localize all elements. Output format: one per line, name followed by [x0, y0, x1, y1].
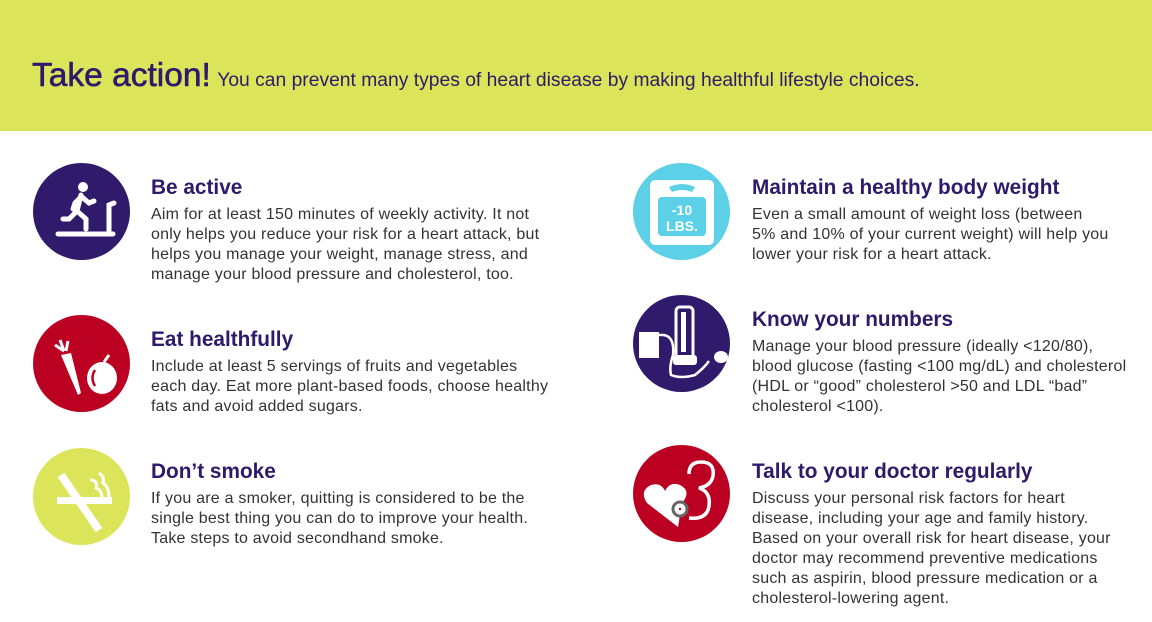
item: be active — [151, 176, 539, 283]
item: talk to doctor: Talk to your doctor regularly — [752, 460, 1032, 483]
title: Take action! You can prevent many types of heart disease by making healthful lifestyle choices. — [32, 57, 920, 94]
item: don't smoke: Take steps to avoid secondhand smoke. — [151, 530, 444, 547]
item: be active: helps you manage your weight, manage stress, and — [151, 246, 528, 263]
header banner — [0, 0, 1152, 131]
item: don't smoke: If you are a smoker, quitting is considered to be the — [151, 490, 525, 507]
item: know your numbers — [752, 308, 1126, 415]
item: be active: only helps you reduce your risk for a heart attack, but — [151, 226, 539, 243]
item: don't smoke — [151, 460, 528, 547]
item: talk to doctor: doctor may recommend preventive medications — [752, 550, 1098, 567]
item: talk to doctor: Based on your overall risk for heart disease, your — [752, 530, 1111, 547]
icon: treadmill — [33, 163, 130, 260]
item: talk to doctor: disease, including your age and family history. — [752, 510, 1088, 527]
item: talk to doctor: Discuss your personal risk factors for heart — [752, 490, 1065, 507]
item: healthy weight: 5% and 10% of your current weight) will help you — [752, 226, 1109, 243]
icon: scale: LBS. — [666, 218, 698, 234]
item: eat healthfully — [151, 328, 548, 415]
item: know your numbers: Know your numbers — [752, 308, 953, 331]
icon: blood pressure — [633, 295, 730, 392]
icon: heart stethoscope — [633, 445, 730, 542]
icon: scale: -10 — [672, 202, 692, 218]
item: talk to doctor: such as aspirin, blood pressure medication or a — [752, 570, 1098, 587]
item: talk to doctor — [752, 460, 1111, 607]
item: know your numbers: cholesterol <100). — [752, 398, 884, 415]
item: healthy weight: lower your risk for a heart attack. — [752, 246, 992, 263]
item: don't smoke: Don’t smoke — [151, 460, 276, 483]
item: know your numbers: (HDL or “good” cholesterol >50 and LDL “bad” — [752, 378, 1087, 395]
item: be active: manage your blood pressure and cholesterol, too. — [151, 266, 514, 283]
item: eat healthfully: fats and avoid added sugars. — [151, 398, 363, 415]
item: be active: Be active — [151, 176, 242, 199]
item: don't smoke: single best thing you can do to improve your health. — [151, 510, 528, 527]
item: know your numbers: blood glucose (fasting <100 mg/dL) and cholesterol — [752, 358, 1126, 375]
icon: no smoking — [33, 448, 130, 545]
item: know your numbers: Manage your blood pressure (ideally <120/80), — [752, 338, 1093, 355]
item: be active: Aim for at least 150 minutes of weekly activity. It not — [151, 206, 529, 223]
icon: scale — [633, 163, 730, 260]
item: healthy weight: Even a small amount of weight loss (between — [752, 206, 1083, 223]
item: eat healthfully: each day. Eat more plant-based foods, choose healthy — [151, 378, 548, 395]
item: eat healthfully: Eat healthfully — [151, 328, 293, 351]
item: eat healthfully: Include at least 5 servings of fruits and vegetables — [151, 358, 517, 375]
item: talk to doctor: cholesterol-lowering agent. — [752, 590, 949, 607]
icon: vegetables — [33, 315, 130, 412]
item: healthy weight — [752, 176, 1109, 263]
item: healthy weight: Maintain a healthy body weight — [752, 176, 1059, 199]
